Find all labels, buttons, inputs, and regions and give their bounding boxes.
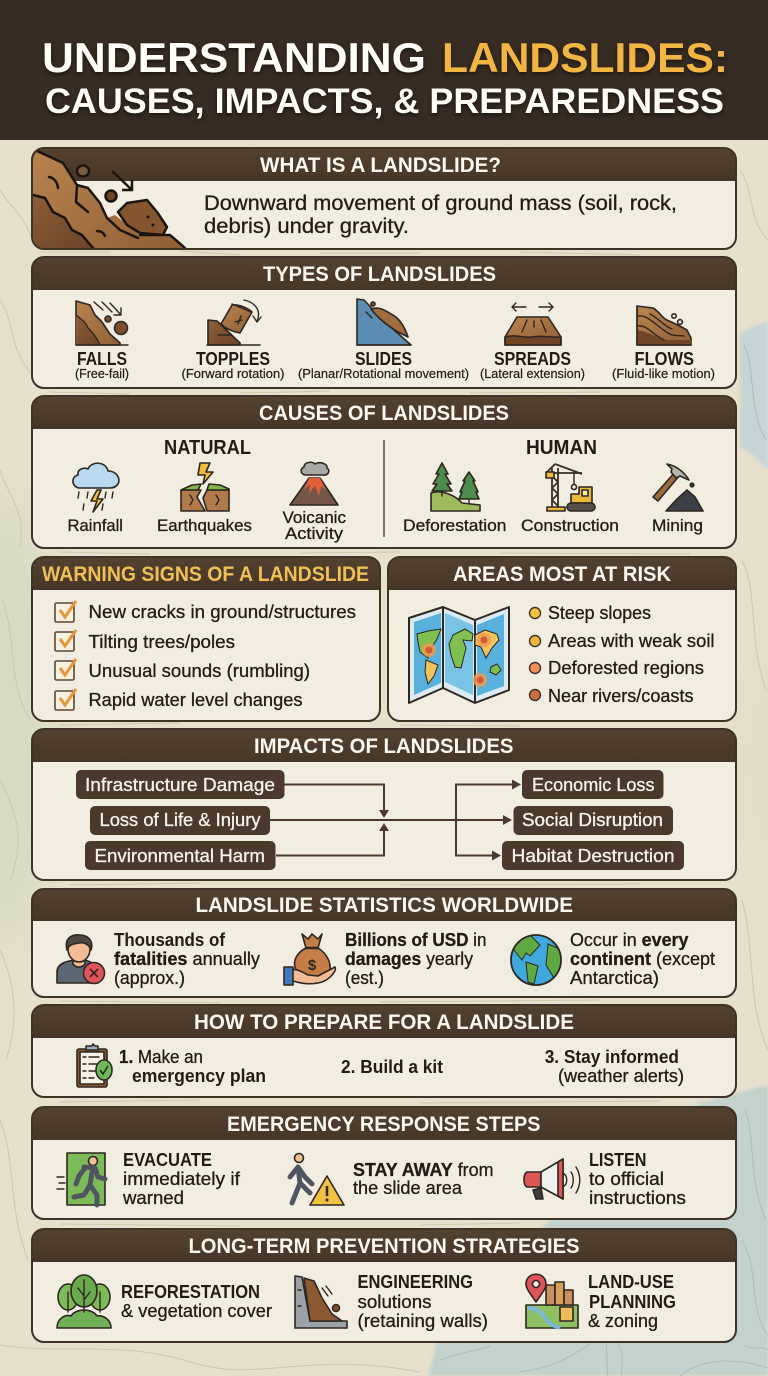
icon: rainfall: [73, 463, 119, 512]
panel: what is a landslide: [30, 148, 736, 250]
heading: LANDSLIDE STATISTICS WORLDWIDE: [196, 894, 573, 917]
icon: megaphone: [524, 1159, 580, 1199]
icon: mining: [653, 464, 703, 511]
strategy: reforestation: [121, 1282, 272, 1321]
label: volcanic activity: [282, 508, 346, 543]
label: earthquakes: Earthquakes: [157, 516, 252, 535]
risk list item: rivers and coasts: Near rivers/coasts: [548, 686, 694, 706]
stat: damages: Billions of USD in: [345, 930, 486, 950]
label: flows: FLOWS: [634, 349, 694, 369]
checklist item 2: Tilting trees/poles: [88, 632, 235, 652]
label: topples: TOPPLES: [196, 349, 270, 369]
step 3: 3. Stay informed: [545, 1047, 679, 1067]
icon: money bag in hand: [284, 934, 335, 985]
step 3: (weather alerts): [558, 1066, 684, 1086]
heading: AREAS MOST AT RISK: [453, 563, 671, 586]
step: listen: to official: [589, 1169, 664, 1189]
step: stay away: STAY AWAY from: [353, 1160, 494, 1180]
risk list item: weak soil: Areas with weak soil: [548, 631, 714, 651]
panel: causes of landslides: [32, 396, 736, 548]
icon: money bag in hand: $: [308, 957, 317, 974]
title line 2: CAUSES, IMPACTS, & PREPAREDNESS: [45, 82, 724, 121]
label: volcanic activity: Activity: [285, 524, 344, 543]
step: stay away: the slide area: [353, 1178, 463, 1198]
flow arrows: [270, 780, 521, 860]
box: habitat destruction: [502, 841, 684, 870]
strategy: engineering: (retaining walls): [358, 1311, 488, 1331]
strategy: land-use planning: [588, 1272, 676, 1331]
title line 1: UNDERSTANDING: [42, 34, 426, 81]
strategy: engineering: ENGINEERING: [358, 1272, 473, 1292]
panel: warning signs: [32, 557, 380, 721]
stat: fatalities: [114, 930, 260, 988]
label: volcanic activity: Voicanic: [282, 508, 346, 527]
risk list item: steep slopes: Steep slopes: [548, 603, 651, 623]
box: habitat destruction: Habitat Destruction: [512, 846, 674, 866]
stat: fatalities: fatalities annually: [114, 949, 260, 969]
label: flows: [612, 349, 715, 381]
panel: emergency response steps: [32, 1107, 736, 1219]
stat: damages: damages yearly: [345, 949, 473, 969]
step: evacuate: [122, 1150, 241, 1208]
box: loss of life: [90, 806, 270, 835]
stat: continents: continent (except: [570, 949, 715, 969]
box: social disruption: [514, 806, 673, 835]
definition text: [204, 192, 677, 238]
icon: land-use map: [526, 1274, 578, 1328]
heading: EMERGENCY RESPONSE STEPS: [227, 1113, 540, 1136]
heading: IMPACTS OF LANDSLIDES: [254, 735, 514, 758]
label: flows: (Fluid-like motion): [612, 367, 715, 381]
step: evacuate: EVACUATE: [123, 1150, 212, 1170]
step 1: [119, 1047, 266, 1086]
title banner: [0, 0, 768, 140]
heading: WHAT IS A LANDSLIDE?: [260, 154, 501, 177]
icon: globe: [511, 935, 562, 985]
label: construction: Construction: [521, 516, 619, 535]
strategy: reforestation: REFORESTATION: [121, 1282, 260, 1302]
icon: flows: [637, 306, 691, 345]
label: spreads: (Lateral extension): [480, 367, 585, 381]
stat: continents: Antarctica): [570, 968, 659, 988]
risk list item: deforested regions: Deforested regions: [548, 658, 704, 678]
panel: impacts of landslides: [32, 729, 736, 880]
panel: statistics worldwide: [32, 889, 736, 997]
box: environmental harm: [85, 841, 276, 870]
stat: continents: [570, 930, 715, 988]
stat: fatalities: (approx.): [114, 968, 185, 988]
checklist item 3: Unusual sounds (rumbling): [88, 661, 310, 681]
label: spreads: [480, 349, 585, 381]
icon: slides: [357, 299, 411, 345]
icon: folded world map: [409, 607, 509, 703]
label: deforestation: Deforestation: [403, 516, 506, 535]
icon: person with x: [57, 935, 104, 984]
checklist item 1: New cracks in ground/structures: [88, 602, 356, 622]
step: listen: [589, 1150, 686, 1208]
heading: WARNING SIGNS OF A LANDSLIDE: [42, 563, 369, 586]
step 3: [545, 1047, 684, 1086]
label: topples: (Forward rotation): [182, 367, 284, 381]
label: mining: Mining: [652, 516, 703, 535]
icon: spreads: [505, 303, 561, 345]
heading: LONG-TERM PREVENTION STRATEGIES: [188, 1235, 580, 1258]
label: topples: [182, 349, 284, 381]
strategy: reforestation: & vegetation cover: [121, 1301, 272, 1321]
box: loss of life: Loss of Life & Injury: [100, 810, 260, 830]
stat: damages: [345, 930, 486, 988]
definition text: debris) under gravity.: [204, 215, 409, 238]
title line 1: [42, 34, 728, 81]
icon: earthquakes: [181, 463, 229, 511]
label: slides: [298, 349, 469, 381]
box: environmental harm: Environmental Harm: [94, 846, 265, 866]
panel: types of landslides: [32, 257, 736, 388]
step: listen: instructions: [589, 1188, 686, 1208]
icon: falls: [76, 301, 128, 345]
icon: clipboard checklist: [77, 1044, 112, 1087]
strategy: engineering: [358, 1272, 488, 1331]
step: stay away: [353, 1160, 494, 1198]
subheading: natural: NATURAL: [164, 437, 251, 459]
step: listen: LISTEN: [589, 1150, 646, 1170]
step 2: 2. Build a kit: [341, 1057, 443, 1077]
panel: how to prepare: [32, 1005, 736, 1097]
heading: TYPES OF LANDSLIDES: [263, 263, 496, 286]
box: economic loss: Economic Loss: [532, 775, 654, 795]
step: evacuate: immediately if: [123, 1169, 241, 1189]
step: evacuate: warned: [122, 1188, 184, 1208]
checklist item 4: Rapid water level changes: [88, 690, 302, 710]
icon: hillside landslide: [30, 148, 187, 250]
label: falls: FALLS: [77, 349, 127, 369]
step 1: 1. Make an: [119, 1047, 203, 1067]
box: infrastructure damage: [76, 770, 284, 799]
strategy: engineering: solutions: [358, 1292, 432, 1312]
heading: CAUSES OF LANDSLIDES: [259, 402, 509, 425]
icon: topples: [207, 300, 261, 345]
heading: HOW TO PREPARE FOR A LANDSLIDE: [194, 1011, 574, 1034]
label: spreads: SPREADS: [494, 349, 571, 369]
icon: person with warning: [290, 1154, 344, 1205]
stat: continents: Occur in every: [570, 930, 688, 950]
definition text: Downward movement of ground mass (soil, rock,: [204, 192, 677, 215]
label: slides: SLIDES: [355, 349, 412, 369]
stat: damages: (est.): [345, 968, 384, 988]
label: falls: (Free-fail): [75, 367, 129, 381]
icon: reforestation trees: [57, 1275, 111, 1328]
stat: fatalities: Thousands of: [114, 930, 226, 950]
label: falls: [75, 349, 129, 381]
panel: long-term prevention: [32, 1229, 736, 1342]
icon: deforestation: [431, 463, 480, 511]
label: rainfall: Rainfall: [68, 516, 123, 535]
icon: volcano: [290, 462, 338, 505]
icon: retaining wall: [295, 1276, 347, 1328]
title line 1: LANDSLIDES:: [442, 34, 728, 81]
strategy: land-use planning: & zoning: [588, 1311, 658, 1331]
strategy: land-use planning: PLANNING: [589, 1292, 676, 1312]
box: infrastructure damage: Infrastructure Damage: [85, 775, 275, 795]
strategy: land-use planning: LAND-USE: [588, 1272, 674, 1292]
box: social disruption: Social Disruption: [522, 810, 663, 830]
icon: construction: [546, 464, 595, 511]
panel: areas most at risk: [388, 557, 736, 721]
icon: running exit: [57, 1153, 105, 1205]
subheading: human: HUMAN: [526, 437, 597, 459]
label: slides: (Planar/Rotational movement): [298, 367, 469, 381]
box: economic loss: [522, 770, 664, 799]
step 1: emergency plan: [132, 1066, 266, 1086]
